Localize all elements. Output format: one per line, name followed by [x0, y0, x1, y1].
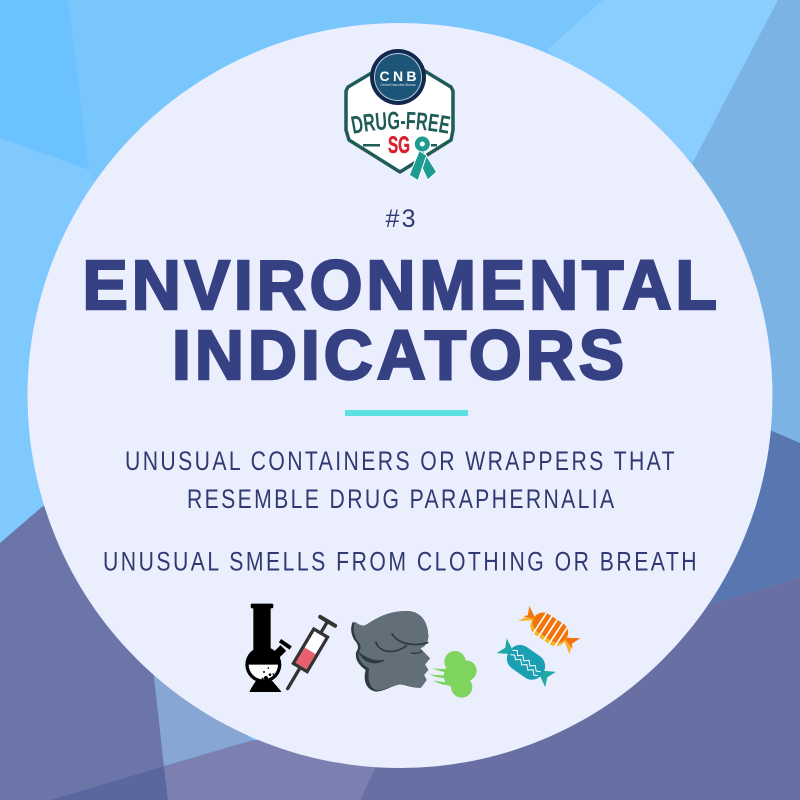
logo: CNB Drug-Free SG badge: Central Narcotics Bureau [380, 83, 416, 87]
divider bar [345, 410, 468, 416]
title: ENVIRONMENTAL [82, 246, 717, 324]
icon: syringe [280, 617, 335, 693]
body text: UNUSUAL CONTAINERS OR WRAPPERS THAT [125, 447, 675, 477]
icon: green smell cloud [429, 651, 477, 698]
title [82, 246, 717, 394]
icon: orange candy [518, 606, 580, 654]
logo: CNB Drug-Free SG badge: SG [388, 132, 410, 159]
logo: CNB Drug-Free SG badge: DRUG-FREE [350, 112, 450, 134]
logo: CNB Drug-Free SG badge: CNB [380, 68, 416, 84]
body text: UNUSUAL SMELLS FROM CLOTHING OR BREATH [103, 547, 697, 577]
icon: head exhaling [351, 611, 430, 692]
body text: RESEMBLE DRUG PARAPHERNALIA [187, 485, 614, 515]
number label: #3 [386, 205, 416, 233]
icon: bong [245, 604, 291, 692]
icon: teal candy [494, 635, 558, 690]
logo: CNB Drug-Free SG badge [344, 49, 455, 181]
body text [103, 447, 697, 577]
title: INDICATORS [172, 316, 624, 394]
